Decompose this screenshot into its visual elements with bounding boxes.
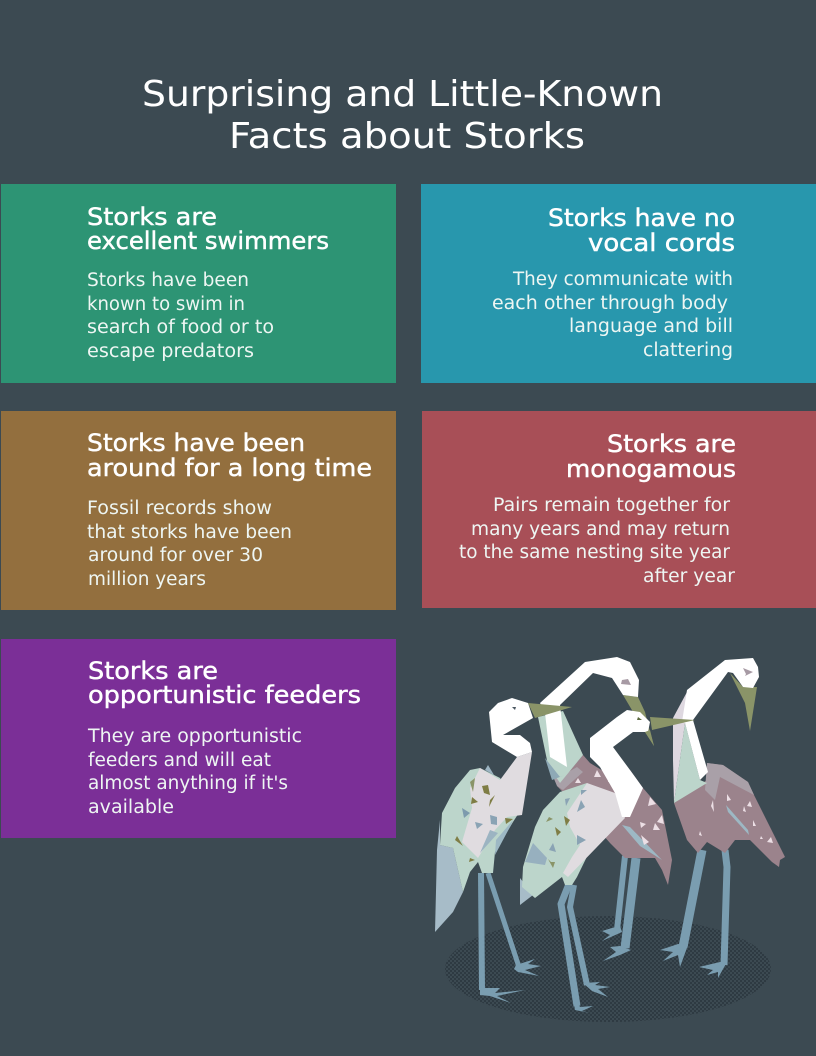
panel: opportunistic feeders: Storks are: [88, 657, 218, 685]
panel: monogamous: after year: [643, 566, 735, 587]
panel: no vocal cords: They communicate with: [512, 269, 733, 290]
panel: monogamous: many years and may return: [471, 519, 730, 540]
panel: excellent swimmers: Storks have been: [87, 270, 249, 291]
stork: back middle: [538, 657, 672, 961]
title: Facts about Storks: [229, 116, 585, 157]
stork: front: [520, 710, 695, 1013]
panel: long time: around for a long time: [87, 454, 372, 482]
panel: no vocal cords: language and bill: [569, 316, 733, 337]
illustration: four storks: [435, 657, 785, 1022]
panel: no vocal cords: [421, 184, 816, 383]
panel: long time: million years: [88, 569, 206, 590]
panel: long time: Fossil records show: [87, 498, 272, 519]
panel: excellent swimmers: search of food or to: [87, 317, 274, 338]
panel: opportunistic feeders: almost anything if it's: [88, 773, 288, 794]
panel: excellent swimmers: [1, 184, 396, 383]
panel: no vocal cords: clattering: [643, 340, 733, 361]
panel: opportunistic feeders: feeders and will eat: [88, 750, 271, 771]
panel: monogamous: monogamous: [566, 455, 736, 483]
panel: opportunistic feeders: available: [88, 797, 174, 818]
title: Surprising and Little-Known: [142, 74, 663, 115]
ground shadow: [445, 916, 771, 1022]
panel: excellent swimmers: escape predators: [87, 341, 254, 362]
panel: no vocal cords: each other through body: [492, 293, 728, 314]
panel: monogamous: Pairs remain together for: [493, 495, 730, 516]
panel: long time: around for over 30: [88, 545, 263, 566]
panel: no vocal cords: Storks have no: [548, 204, 735, 232]
panel: long time: Storks have been: [87, 429, 305, 457]
panel: opportunistic feeders: They are opportunistic: [87, 726, 302, 747]
stork: right: [660, 658, 785, 978]
panel: opportunistic feeders: opportunistic feeders: [88, 681, 361, 709]
panel: monogamous: Storks are: [607, 430, 736, 458]
panel: excellent swimmers: known to swim in: [87, 294, 245, 315]
panel: long time: that storks have been: [87, 522, 292, 543]
panel: no vocal cords: vocal cords: [588, 229, 735, 257]
panel: excellent swimmers: excellent swimmers: [87, 227, 329, 255]
title: [142, 74, 663, 157]
stork: left: [435, 698, 572, 1003]
panel: monogamous: [422, 411, 816, 608]
panel: monogamous: to the same nesting site year: [459, 542, 730, 563]
panel: excellent swimmers: Storks are: [87, 203, 217, 231]
panel: long time: [1, 411, 396, 610]
panel: opportunistic feeders: [1, 639, 396, 838]
